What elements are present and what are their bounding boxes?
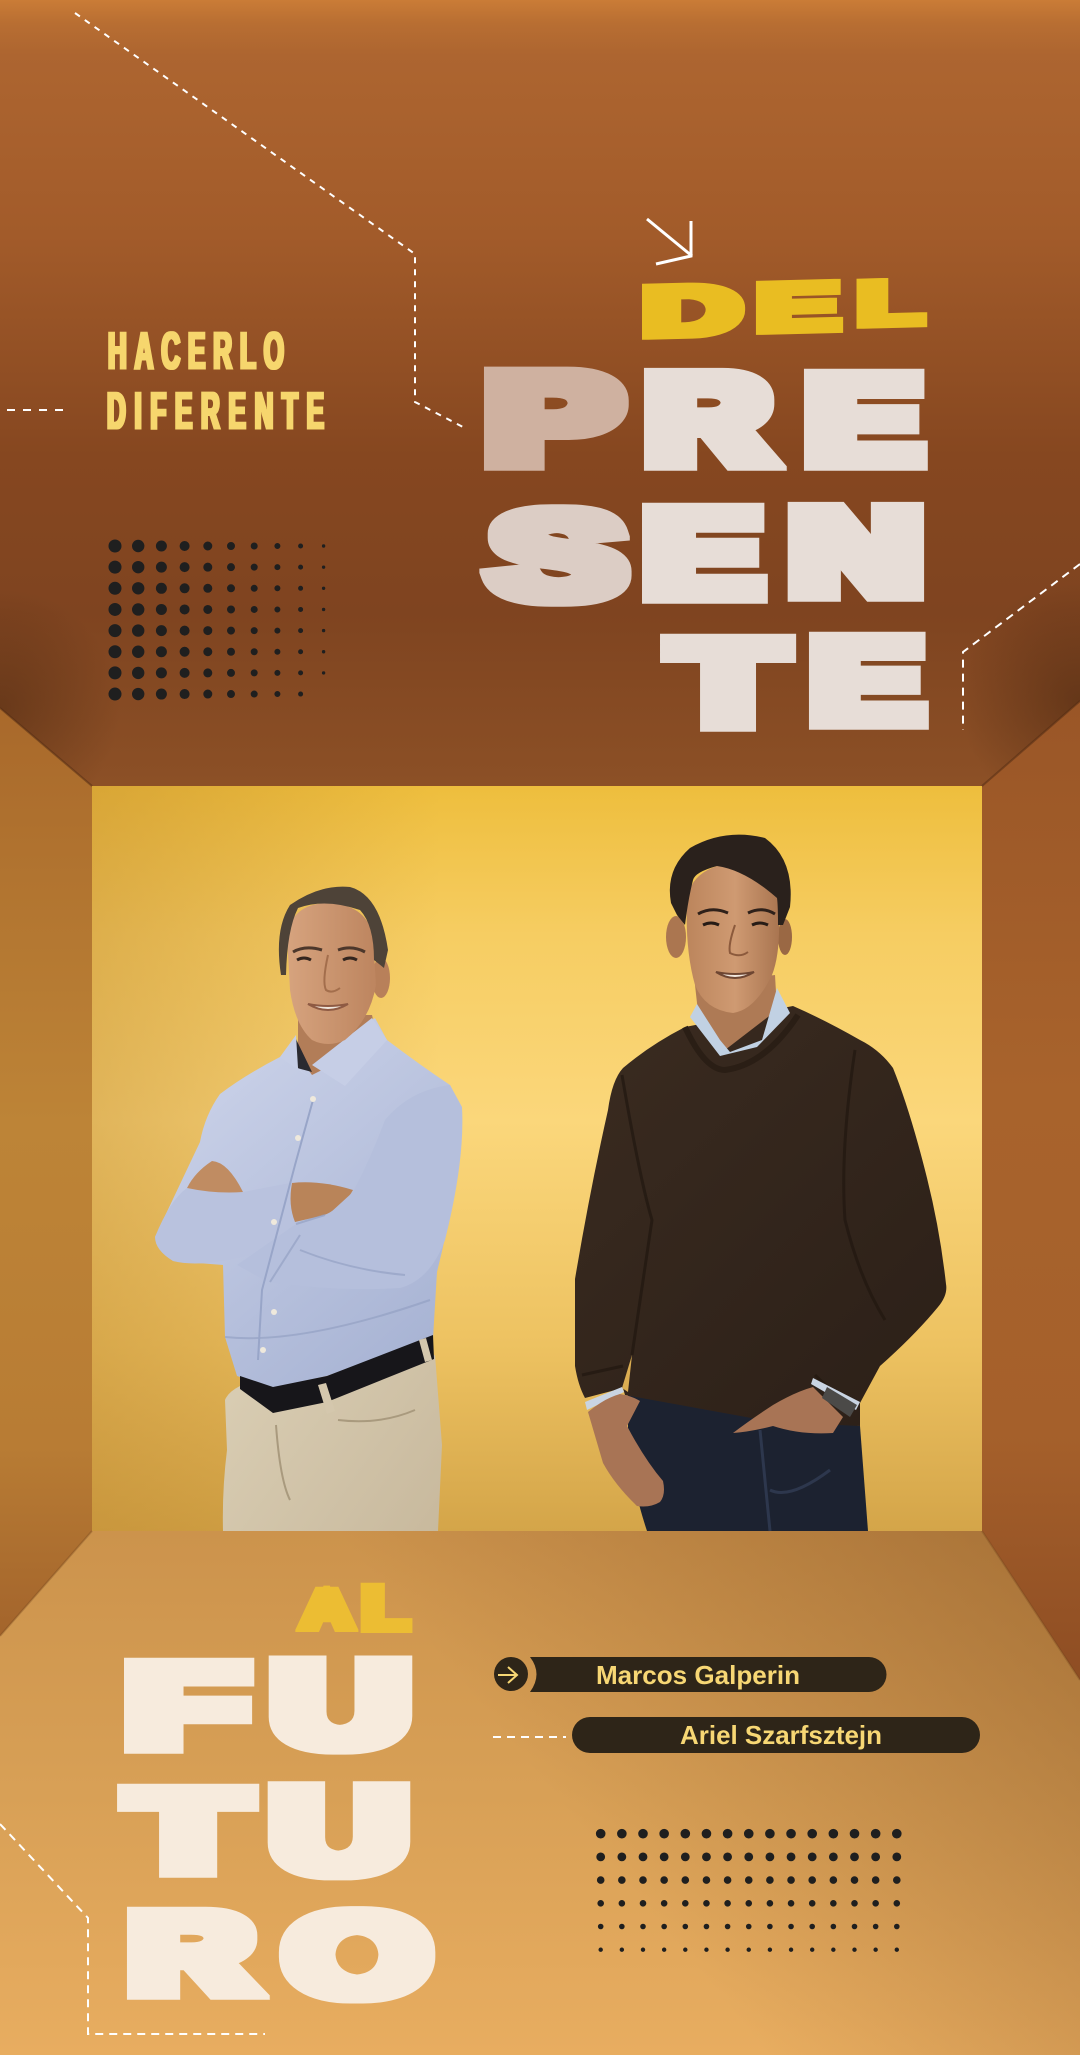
heading: FUTURO: O [286,1891,428,2020]
shirt body [155,1018,462,1388]
subtitle: HACERLO DIFERENTE [107,322,324,440]
decorative dashed line: bottom left [0,1824,265,2034]
sweater arm seams [582,1050,885,1405]
heading: FUTURO: R [130,1891,252,2016]
collar [280,1018,387,1086]
heading: PRESENTE: N [791,483,921,620]
icon: arrow pointing to heading [647,219,692,264]
hand [187,1161,243,1192]
shirt cuffs [585,1378,860,1410]
decorative dashed line: right [963,564,1080,730]
heading: FUTURO: U [272,1764,406,1897]
ear [372,958,390,998]
gap between arm and body [622,1355,632,1392]
dark inner collar [295,1037,312,1072]
dot grid: top left halftone [115,546,324,695]
background: floor of the box [0,1531,1080,2055]
hand right [733,1387,843,1433]
face details [698,910,775,914]
heading: DEL: L [858,269,922,338]
heading: FUTURO [127,1639,428,2020]
shirt collar [690,988,790,1056]
neckline rib [685,1015,798,1070]
left sleeve [155,1183,293,1263]
heading: PRESENTE: T [673,617,783,750]
name label: Ariel Szarfsztejn [572,1717,980,1753]
heading: FUTURO: F [127,1641,246,1771]
photo: Ariel Szarfsztejn [575,835,946,1531]
heading: FUTURO: U [273,1639,408,1771]
dot grid: bottom right halftone [601,1834,900,1950]
trousers [223,1355,442,1531]
heading: AL [302,1574,408,1642]
background: ceiling of the box [0,0,1080,786]
heading: DEL: D [643,271,741,350]
heading: PRESENTE: E [807,351,920,489]
hair [279,887,388,975]
heading: PRESENTE: R [647,349,769,489]
hand left [588,1394,664,1506]
panel: yellow photo backdrop [92,786,982,1531]
shirt buttons and placket [258,1100,313,1360]
heading: DEL [643,269,922,350]
decorative dashed line: top [75,13,463,427]
heading: PRESENTE: S [492,487,623,623]
background: left wall [0,708,92,1636]
name label: Marcos Galperin [530,1657,886,1692]
head [287,903,376,1044]
photo: Marcos Galperin [155,887,462,1531]
right sleeve [237,1085,462,1289]
icon: arrow circle [494,1657,528,1691]
heading: AL: A [302,1580,352,1640]
head [687,866,779,1013]
heading: PRESENTE [487,348,921,750]
heading: DEL: E [757,269,839,345]
hair [670,835,791,925]
name label: Ariel Szarfsztejn: Ariel Szarfsztejn [680,1720,882,1750]
watch [822,1387,857,1417]
belt [240,1335,434,1413]
neck [695,975,777,1050]
subtitle: HACERLO DIFERENTE: DIFERENTE [107,382,324,440]
ears [666,916,686,958]
forearm [291,1182,353,1222]
heading: AL: L [362,1574,408,1642]
background: right wall [982,701,1080,1680]
heading: PRESENTE: E [645,485,760,622]
heading: FUTURO: T [130,1768,246,1895]
decorative dashed line: left [7,409,64,411]
heading: PRESENTE: P [487,348,620,490]
jeans [628,1389,868,1531]
subtitle: HACERLO DIFERENTE: HACERLO [108,322,284,380]
face details [293,948,365,952]
neck [298,1015,378,1075]
name label: Marcos Galperin: Marcos Galperin [596,1660,800,1690]
sweater [575,1006,946,1426]
decorative dashed line: name [493,1736,566,1738]
heading: PRESENTE: E [812,615,921,748]
